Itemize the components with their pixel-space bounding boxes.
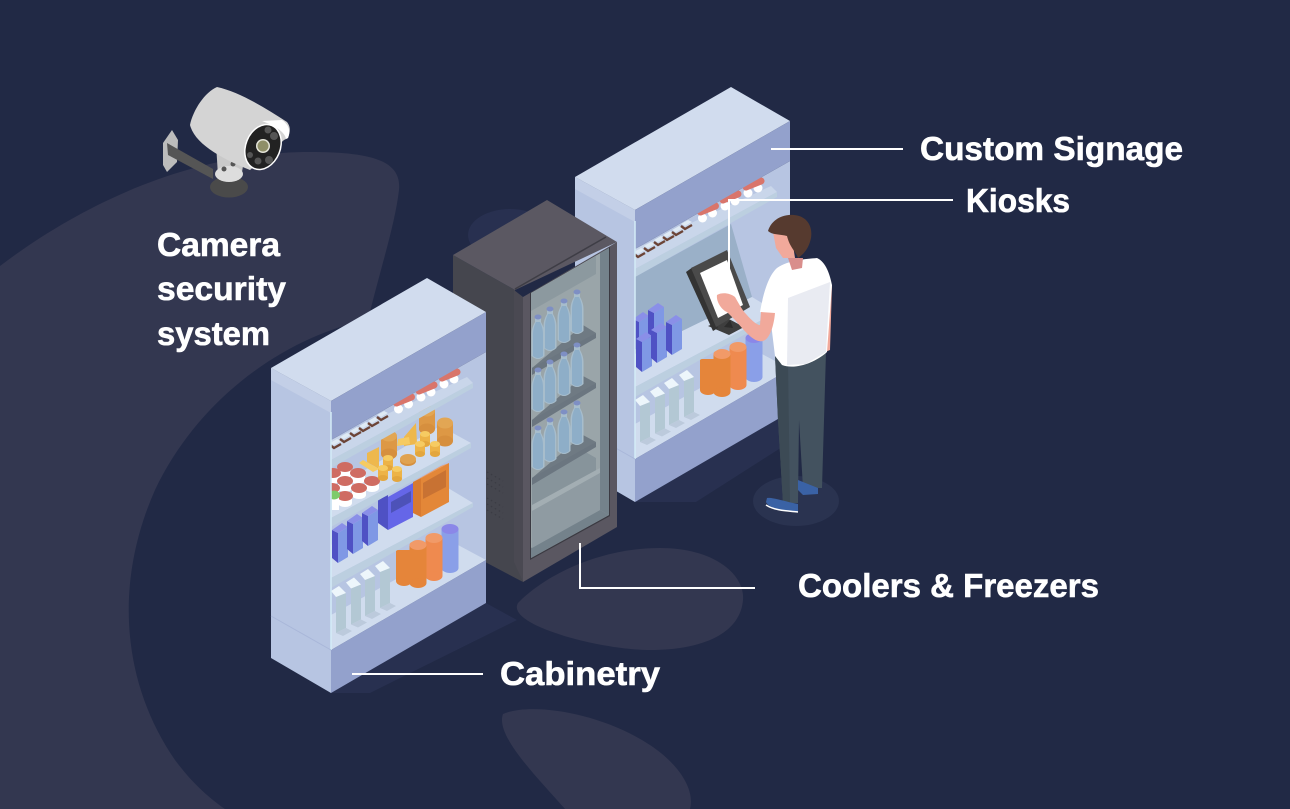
person using kiosk [717,215,832,512]
red-lidded cups [324,462,380,510]
label: kiosks: Kiosks [966,182,1070,219]
cheese and coin stacks [359,406,453,482]
kiosk touchscreen [686,250,750,335]
leader line: custom signage [771,148,903,150]
tall blue cartons [332,506,378,563]
label: coolers and freezers: Coolers & Freezers [798,567,1099,604]
floor shadow: right cabinet [634,410,790,502]
label: cabinetry: Cabinetry [500,655,661,692]
label: camera security system: Camera [157,226,281,263]
background blob: centre [517,548,743,650]
hair [768,215,811,258]
face [773,232,795,258]
floor shadow: left cabinet [331,603,517,693]
orange box [413,463,449,517]
icon: security camera [163,87,290,198]
background blob: left swoosh [0,152,399,809]
neck [788,258,803,270]
label: camera security system: security [157,270,287,307]
leader line: kiosks [729,200,953,272]
blue box [378,483,413,530]
forearm and hand [717,293,775,341]
cooler glass door [530,247,610,560]
floor spot under person [753,476,839,526]
cooler shelves and bottles [532,290,596,485]
milk cartons and cans on bottom shelf [331,524,458,636]
label: custom signage: Custom Signage [920,130,1183,167]
trousers [775,352,826,503]
leader line: coolers and freezers [580,543,755,588]
left cabinet: display shelf unit [271,278,486,693]
background blob: bottom [502,709,691,809]
leader line: cabinetry [352,673,483,675]
shoes [798,480,818,495]
back arm [825,285,832,352]
shirt [760,258,832,367]
cooler / freezer unit [453,200,617,582]
label: camera security system [157,226,287,352]
background blob: behind cooler [468,209,552,261]
right cabinet: display shelf unit [575,87,790,502]
chocolates and lidded cups on top shelf [330,372,458,448]
label: camera security system: system [157,315,270,352]
